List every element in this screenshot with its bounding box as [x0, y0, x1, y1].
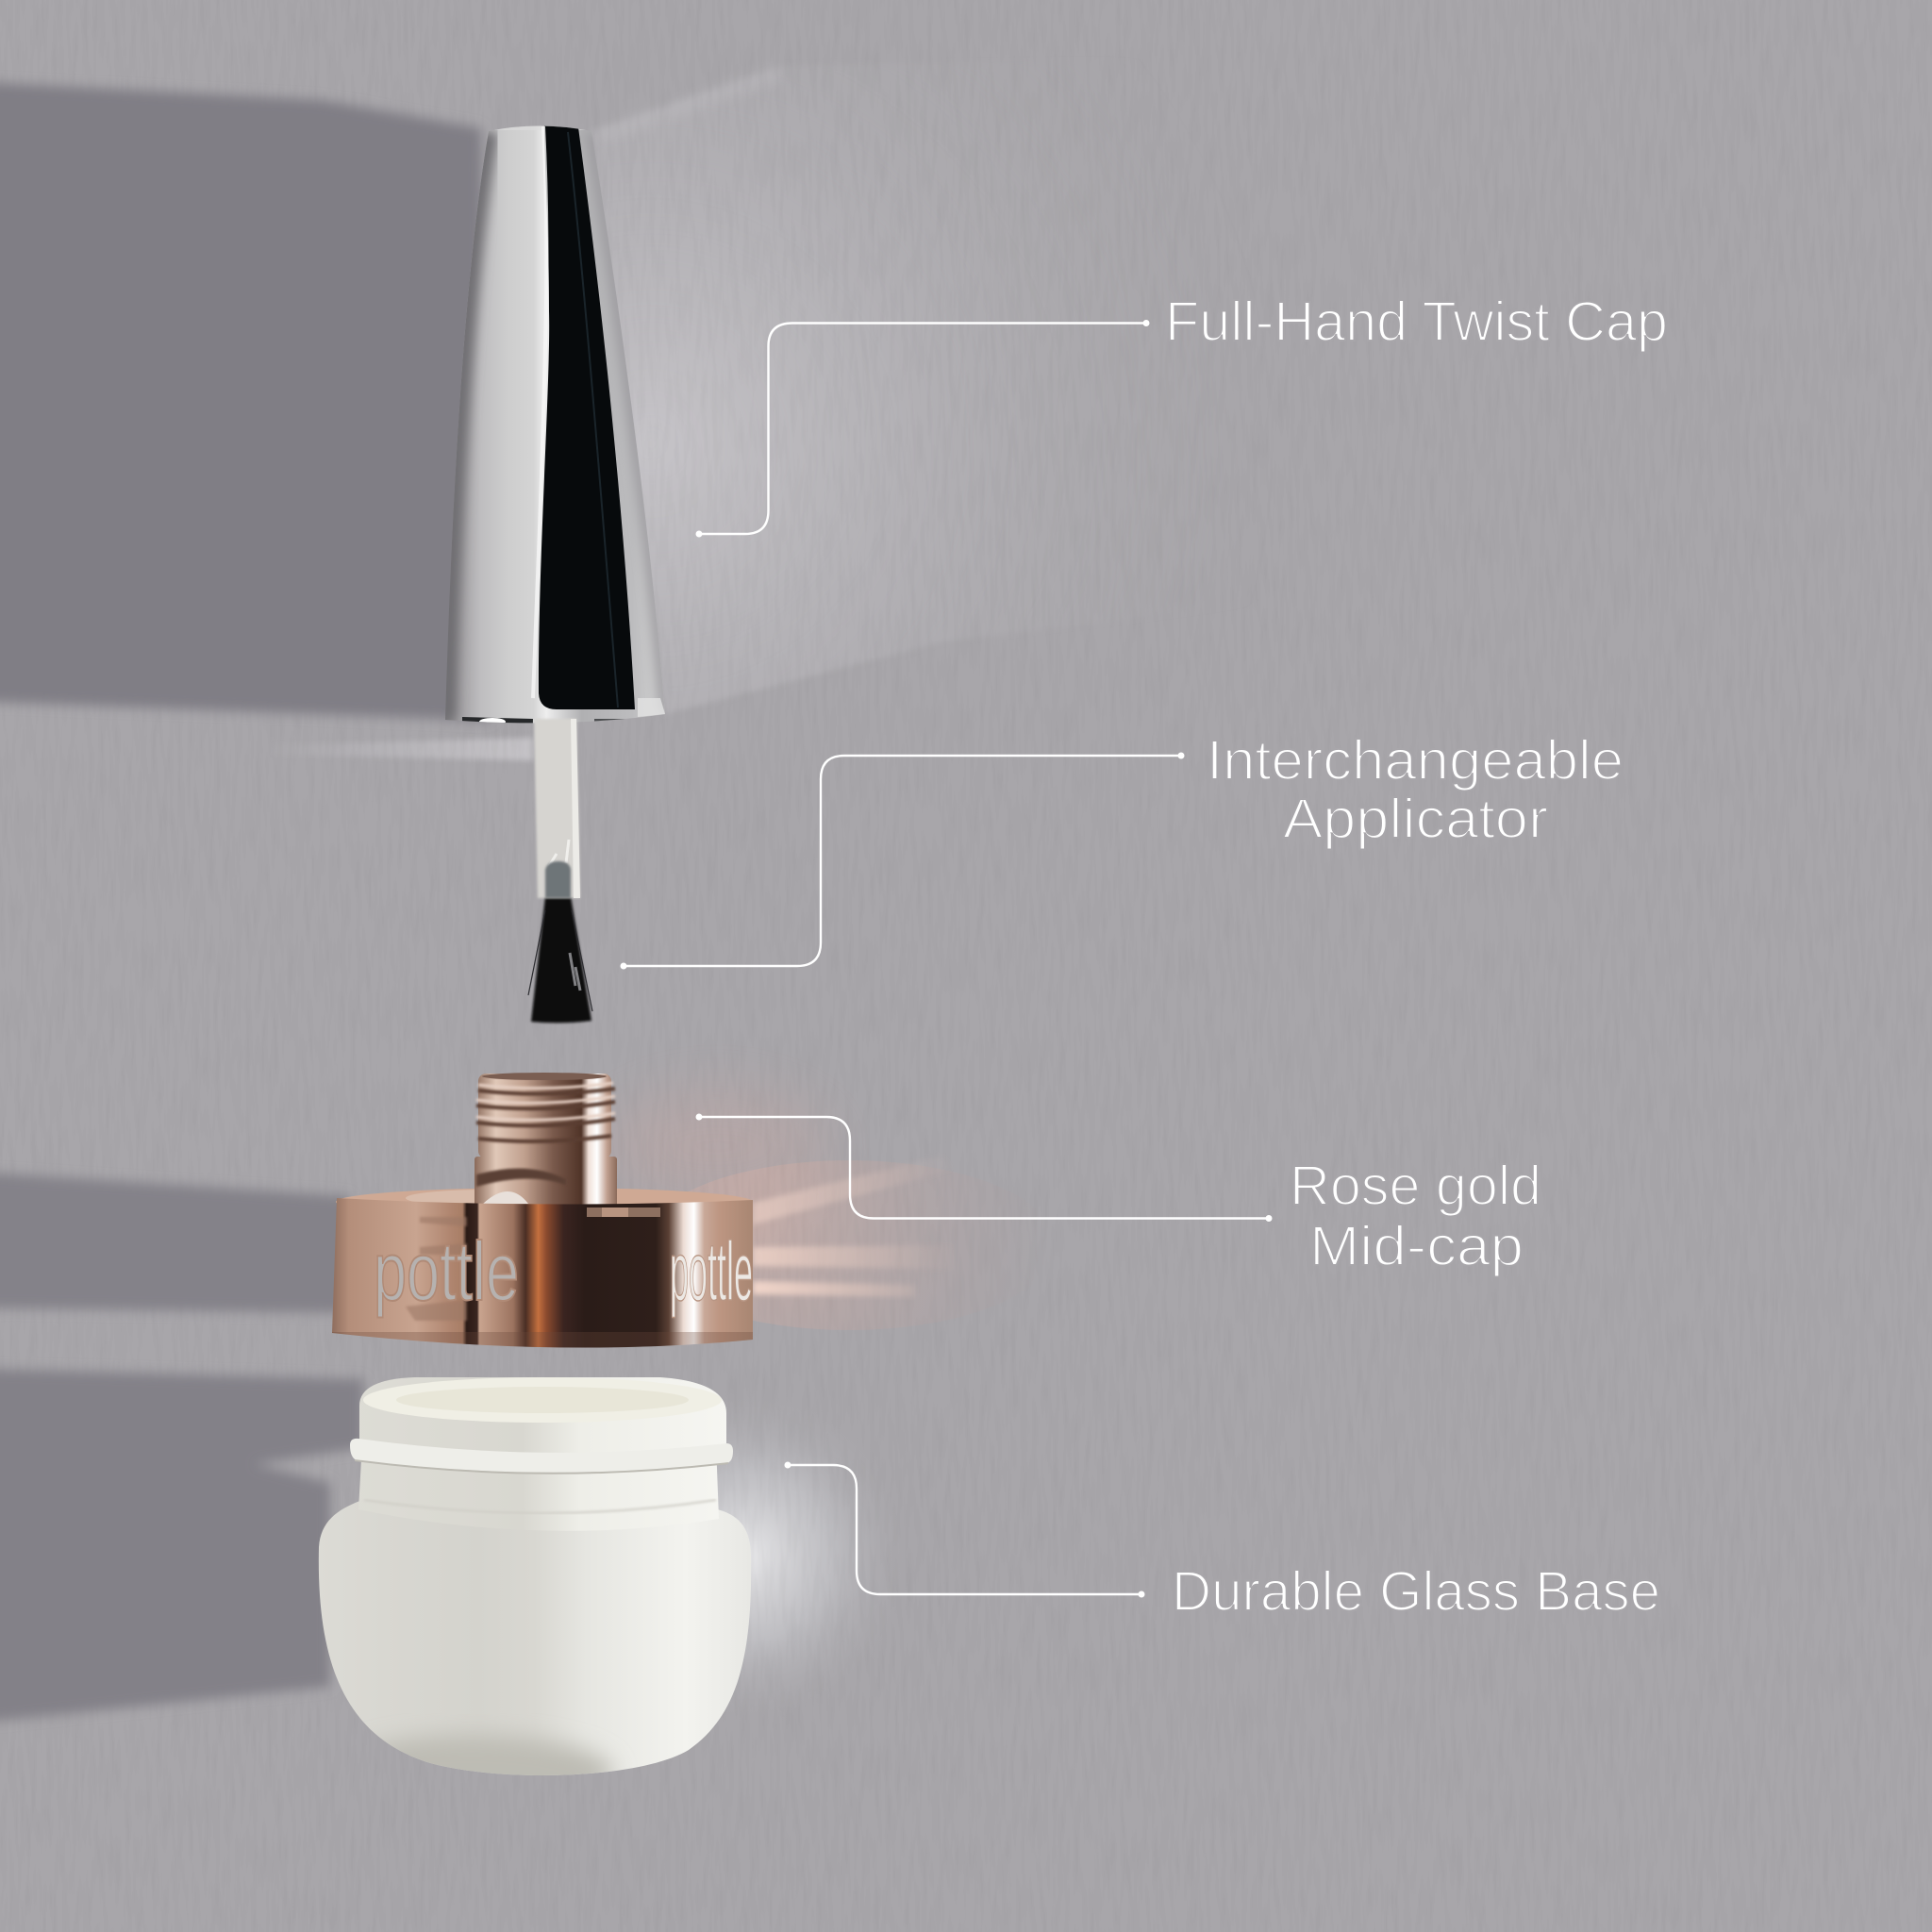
label: Interchangeable: [1207, 729, 1624, 791]
label: Full-Hand Twist Cap: [1165, 291, 1668, 353]
leader line: [785, 1462, 1145, 1598]
callout: Durable Glass Base: [785, 1462, 1660, 1623]
callout: Rose gold Mid-cap: [696, 1113, 1541, 1277]
infographic canvas: [0, 72, 1664, 1775]
infographic canvas: pottle: [670, 1224, 753, 1318]
label: Rose gold: [1290, 1155, 1541, 1217]
product: white glass jar: [319, 1377, 751, 1811]
brush bristles: [531, 896, 591, 1023]
logo text: pottle: [374, 1224, 519, 1318]
product: rose gold mid-cap: [332, 1073, 753, 1360]
threaded neck: [475, 1073, 617, 1209]
brush ferrule: [545, 861, 571, 898]
shadow of cap: [0, 80, 491, 721]
callout: Interchangeable Applicator: [621, 729, 1624, 970]
label: Mid-cap: [1309, 1215, 1524, 1277]
jar body: [319, 1502, 751, 1775]
leader line: [696, 1113, 1272, 1222]
label: [1290, 1155, 1541, 1277]
clear stem: [534, 719, 580, 898]
light beams beside mid-cap: [753, 1156, 953, 1297]
label: [1207, 729, 1624, 850]
product: applicator stem and brush: [528, 719, 592, 1023]
label: Durable Glass Base: [1172, 1560, 1660, 1623]
shadow of jar: [0, 1368, 363, 1726]
jar neck: [350, 1377, 733, 1531]
shadow of mid-cap: [0, 1170, 358, 1313]
ring body: [332, 1198, 753, 1360]
leader line: [696, 320, 1149, 538]
leader line: [621, 753, 1185, 970]
product: silver twist cap: [443, 121, 670, 728]
callout: Full-Hand Twist Cap: [696, 291, 1668, 538]
ring top rim: [336, 1188, 753, 1216]
label: Applicator: [1283, 788, 1548, 850]
cast shadows: [0, 80, 491, 1726]
